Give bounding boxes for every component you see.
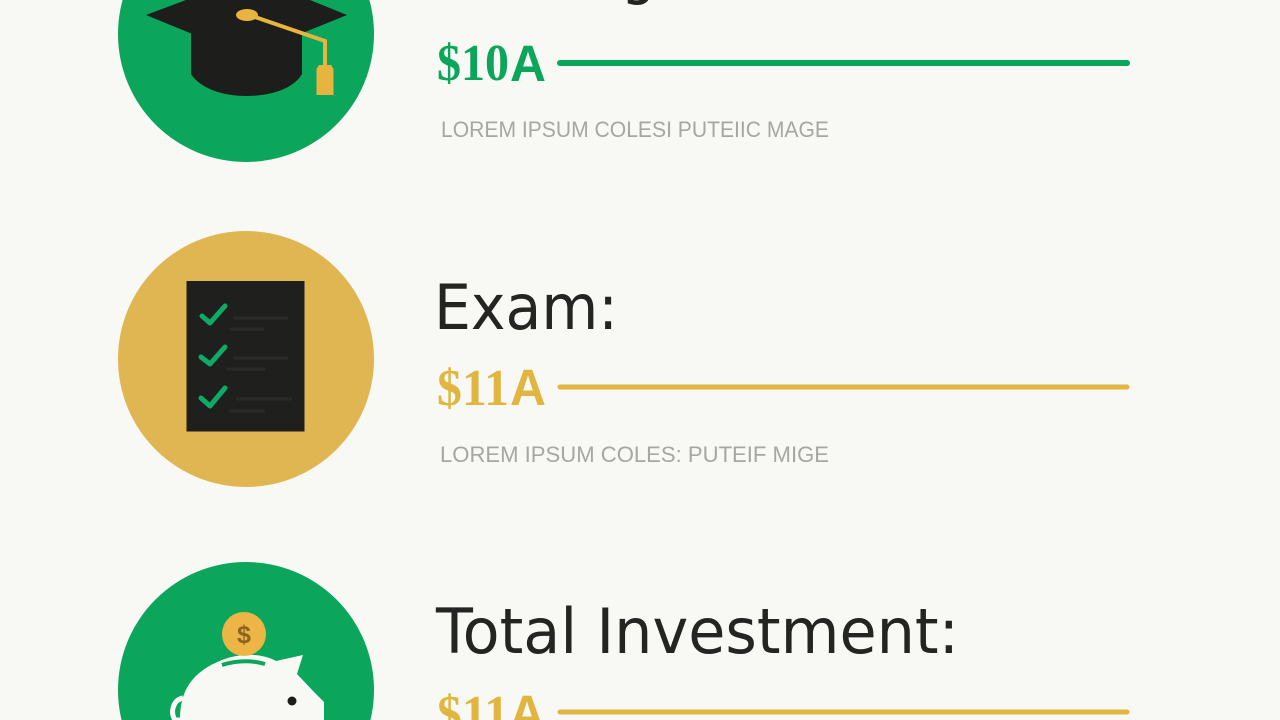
- heading: exam: Exam:: [434, 271, 618, 344]
- panel: total investment row: [118, 562, 1127, 720]
- panel: exam row: [118, 231, 1127, 487]
- icon: graduation cap: [118, 0, 374, 162]
- icon: piggy bank with coin: [118, 562, 374, 720]
- amount: training: A: [510, 35, 546, 92]
- amount: total investment: [437, 685, 545, 720]
- panel: training row: [118, 0, 1127, 162]
- icon: exam checklist: [118, 231, 374, 487]
- amount: exam: [437, 359, 546, 417]
- caption: exam: LOREM IPSUM COLES: PUTEIF MIGE: [440, 442, 829, 467]
- heading: total investment: Total Investment:: [435, 595, 959, 668]
- icon: piggy bank with coin: $: [237, 621, 251, 649]
- amount bar: total investment: [560, 710, 1127, 714]
- amount bar: training: [560, 60, 1127, 66]
- amount: training: $10: [437, 35, 509, 92]
- caption: training: LOREM IPSUM COLESI PUTEIIC MAGE: [441, 117, 829, 142]
- amount: exam: $11: [437, 360, 509, 417]
- amount bar: exam: [560, 384, 1127, 390]
- amount: exam: A: [510, 359, 546, 416]
